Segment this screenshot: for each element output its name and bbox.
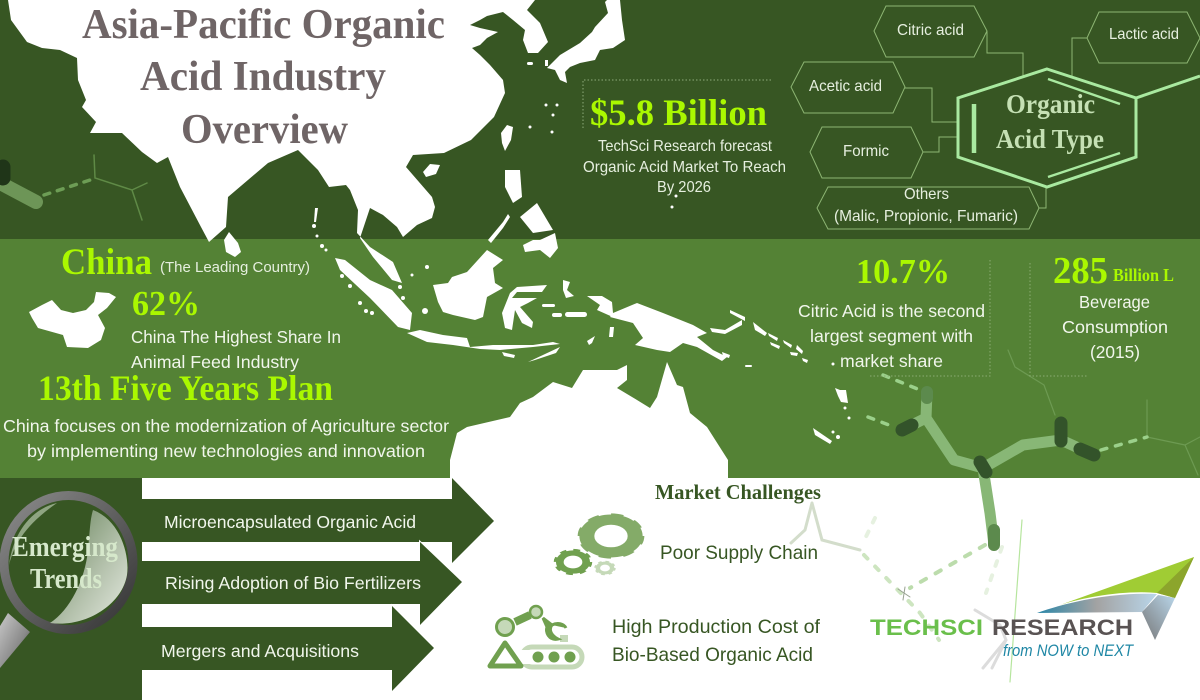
five year plan [3,368,449,461]
beverage consumption stat: Beverage [1079,292,1150,312]
hexagon: others [817,186,1039,229]
connectors [905,31,1087,208]
hexagon: acetic acid [791,62,905,113]
arrow: bio fertilizers: Rising Adoption of Bio Fertilizers [165,573,421,593]
lens highlights [50,510,128,624]
heading: Market Challenges [655,480,821,504]
forecast stat [583,80,786,196]
top dark band [0,0,1200,239]
techsci research logo [870,557,1194,660]
molecule: 3D sticks [868,350,1200,545]
bottom white section [0,478,1200,700]
forecast stat: $5.8 Billion [590,93,767,134]
trend arrows [142,478,494,691]
forecast stat: By 2026 [657,179,711,196]
lens label: Trends [30,564,102,595]
beverage consumption stat: (2015) [1090,342,1140,362]
lens ring [4,496,133,630]
china section [3,242,449,461]
hexagon: formic [810,127,923,178]
left dark panel behind magnifier [0,478,142,700]
molecule: faint network on white [791,503,1022,682]
citric acid stat: Citric Acid is the second [798,301,985,321]
ring label: Organic [1006,89,1095,119]
china heading [61,242,310,283]
handle [0,613,30,668]
production cost label: Bio-Based Organic Acid [612,644,813,666]
map of Asia-Pacific [8,0,850,478]
benzene ring [958,69,1200,187]
five year plan: China focuses on the modernization of Agriculture sector [3,416,449,436]
molecule: left fragment [0,155,147,220]
logo wordmark [870,615,1133,640]
beverage consumption stat [868,250,1174,376]
citric acid stat: largest segment with [810,326,973,346]
beverage consumption stat: Consumption [1062,317,1168,337]
market challenges [490,480,821,667]
ring label: Acid Type [996,124,1104,154]
citric acid stat: 10.7% [856,252,950,291]
beverage consumption stat: 285 [1053,250,1108,292]
arrow: microencapsulated organic acid [142,478,494,563]
china share stat [131,284,341,372]
organic acid type diagram [791,6,1200,229]
icon: robot arm and conveyor [490,606,582,667]
china heading: (The Leading Country) [160,259,310,276]
emerging trends magnifier [0,496,133,668]
hexagon: lactic acid [1087,12,1200,63]
forecast stat: TechSci Research forecast [598,138,772,155]
citric acid stat [798,252,985,371]
hexagon: others: (Malic, Propionic, Fumaric) [834,208,1018,225]
logo wordmark: RESEARCH [992,615,1133,640]
production cost label: High Production Cost of [612,616,821,638]
supply chain label: Poor Supply Chain [660,542,818,564]
hexagon: formic: Formic [843,143,889,160]
five year plan: 13th Five Years Plan [38,368,333,408]
hexagon: citric acid [874,6,987,57]
china share stat: 62% [132,284,200,323]
icon: china map [29,292,116,348]
arrow: microencapsulated organic acid: Microencapsulated Organic Acid [164,512,416,532]
citric acid stat: market share [840,351,943,371]
china share stat: China The Highest Share In [131,327,341,347]
logo tagline: from NOW to NEXT [1003,641,1134,660]
forecast stat: Organic Acid Market To Reach [583,159,786,176]
hexagon: others: Others [904,186,949,203]
arrow: mergers and acquisitions [142,606,434,691]
china heading: China [61,242,152,283]
lens label [12,532,118,595]
five year plan: by implementing new technologies and innovation [27,441,425,461]
arrow: bio fertilizers [142,542,462,625]
icon: gears [556,516,641,574]
china share stat: Animal Feed Industry [131,352,299,372]
hexagon: lactic acid: Lactic acid [1109,26,1179,43]
logo mark [1037,557,1194,640]
title: Asia-Pacific Organic [82,2,445,48]
logo wordmark: TECHSCI [870,615,983,640]
arrow: mergers and acquisitions: Mergers and Acquisitions [161,641,359,661]
ring label [996,89,1104,154]
hexagon: citric acid: Citric acid [897,22,964,39]
beverage consumption stat: Billion L [1113,265,1174,285]
title [82,2,445,153]
hexagon: acetic acid: Acetic acid [809,78,882,95]
lens label: Emerging [12,532,118,563]
title: Overview [181,107,349,153]
title: Acid Industry [140,54,386,100]
middle green band [0,239,1200,478]
production cost label [612,616,821,666]
